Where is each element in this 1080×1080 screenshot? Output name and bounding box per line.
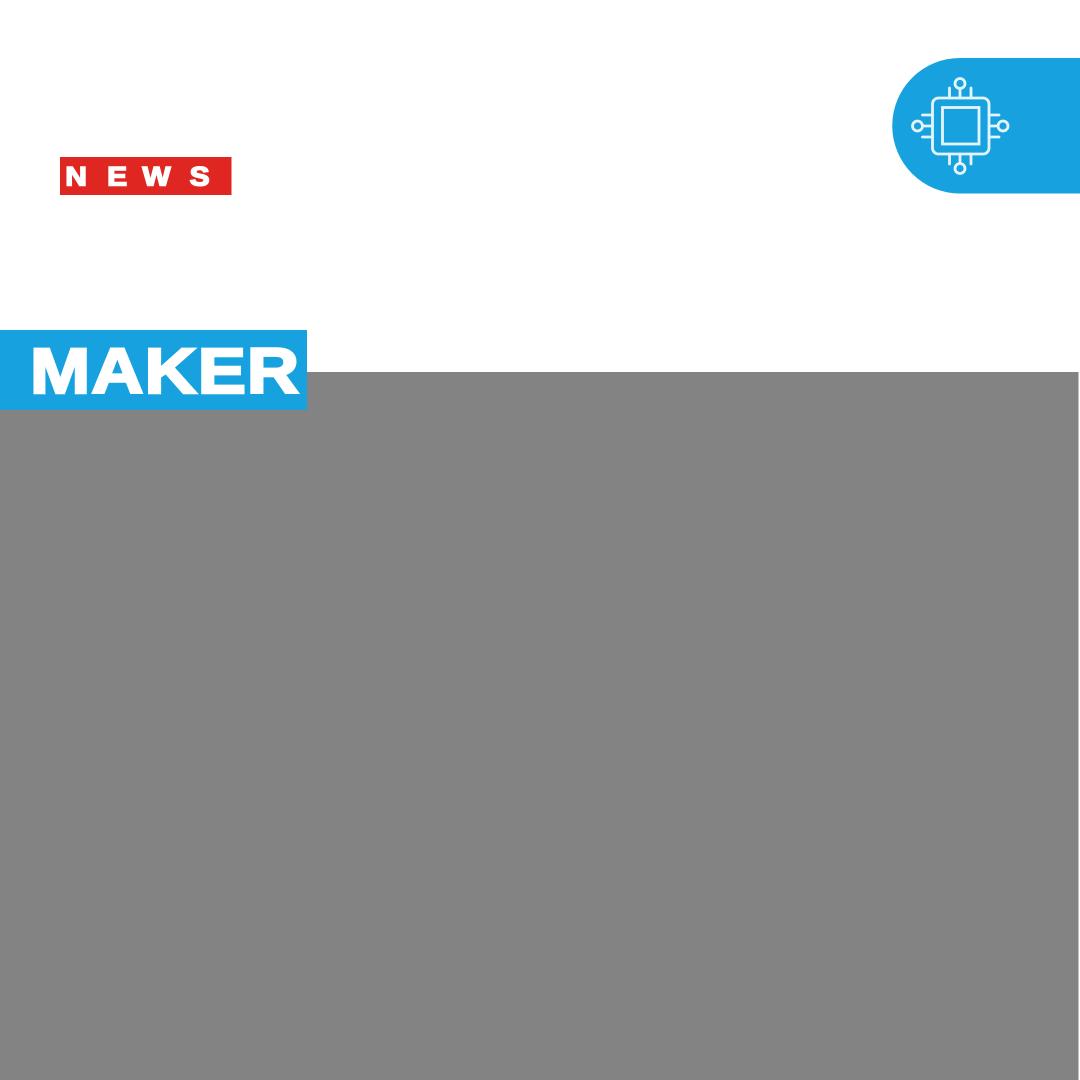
heading: MAKER: MAKER (30, 336, 300, 407)
badge: NEWS: NEWS (65, 162, 210, 192)
panel: gray image placeholder (0, 372, 1078, 1080)
badge: NEWS (60, 157, 232, 195)
tab: blue icon tab (892, 58, 1080, 194)
icon: microchip (912, 78, 1008, 174)
